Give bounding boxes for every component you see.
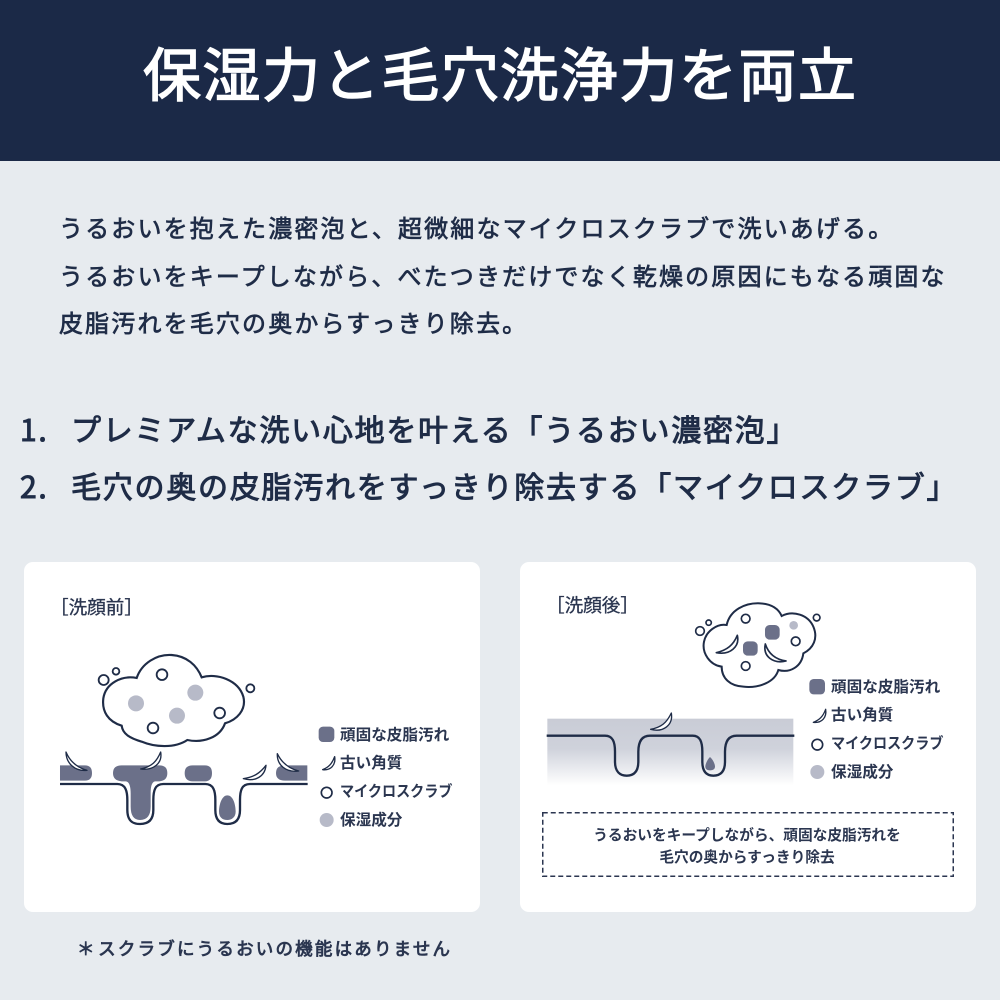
list item 1: 1.	[20, 406, 48, 450]
skin with pores	[547, 719, 794, 785]
panel heading: before: ［洗顔前］	[50, 597, 143, 618]
label: old keratin: 古い角質	[831, 703, 893, 725]
legend labels: after	[831, 675, 944, 782]
panel heading: after: ［洗顔後］	[546, 595, 639, 616]
foam cloud	[696, 603, 820, 687]
label: moisture: 保湿成分	[340, 808, 402, 830]
title banner	[0, 0, 1000, 161]
title: 保湿力と毛穴洗浄力を両立	[143, 44, 858, 109]
label: stubborn sebum: 頑固な皮脂汚れ	[340, 723, 449, 745]
list item 2: 2.	[20, 463, 48, 507]
numbered list	[20, 406, 958, 507]
diagram: after	[542, 602, 954, 877]
label: microscrub: マイクロスクラブ	[831, 732, 943, 754]
label: stubborn sebum: 頑固な皮脂汚れ	[831, 675, 940, 697]
callout text	[593, 827, 901, 866]
callout text: 毛穴の奥からすっきり除去	[659, 850, 835, 866]
label: moisture: 保湿成分	[831, 760, 893, 782]
footnote: ＊ スクラブにうるおいの機能はありません	[77, 939, 452, 959]
intro paragraph	[59, 216, 947, 338]
callout text: うるおいをキープしながら、頑固な皮脂汚れを	[593, 828, 901, 844]
list item 1: プレミアムな洗い心地を叶える「うるおい濃密泡」	[71, 415, 798, 448]
legend swatches	[809, 679, 826, 779]
skin with dirt and pores	[60, 765, 308, 824]
legend swatches	[319, 727, 335, 827]
legend labels: before	[340, 723, 452, 830]
callout border	[543, 813, 953, 876]
label: old keratin: 古い角質	[340, 751, 402, 773]
panel: after washing	[520, 562, 976, 912]
intro paragraph: 皮脂汚れを毛穴の奥からすっきり除去。	[59, 311, 528, 338]
label: microscrub: マイクロスクラブ	[340, 780, 452, 802]
intro paragraph: うるおいを抱えた濃密泡と、超微細なマイクロスクラブで洗いあげる。	[59, 216, 894, 243]
intro paragraph: うるおいをキープしながら、べたつきだけでなく乾燥の原因にもなる頑固な	[59, 264, 947, 290]
diagram: before	[60, 654, 336, 827]
old skin flakes	[66, 752, 299, 780]
panel: before washing	[24, 562, 480, 912]
foam cloud	[99, 655, 254, 746]
list item 2: 毛穴の奥の皮脂汚れをすっきり除去する「マイクロスクラブ」	[71, 472, 958, 505]
skin flake	[651, 713, 672, 730]
